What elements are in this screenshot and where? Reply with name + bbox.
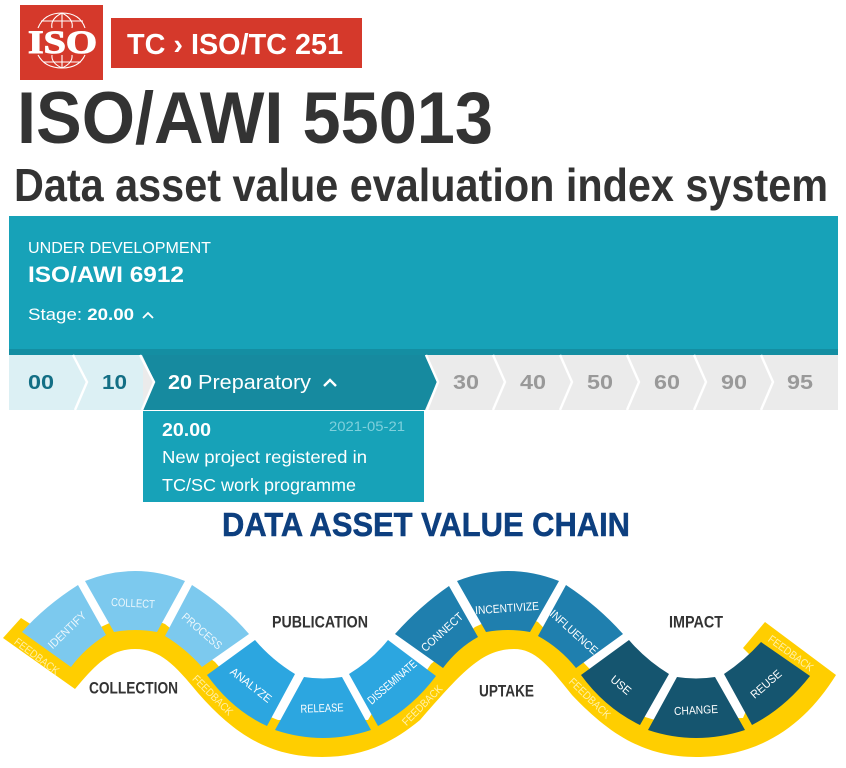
tile labels bbox=[46, 597, 785, 718]
tiles: publication bbox=[207, 640, 436, 738]
feedback labels: FEEDBACK bbox=[765, 633, 816, 675]
feedback labels: FEEDBACK bbox=[566, 676, 613, 722]
stage bar: 50 bbox=[587, 372, 613, 394]
feedback labels: FEEDBACK bbox=[12, 636, 62, 678]
panel: project status: Stage: 20.00 bbox=[28, 306, 134, 324]
tile labels: COLLECT bbox=[111, 597, 155, 611]
phase labels: COLLECTION bbox=[89, 680, 178, 698]
panel: stage detail: 20.00 bbox=[162, 420, 211, 440]
tile labels: DISSEMINATE bbox=[366, 658, 420, 707]
panel: stage detail: New project registered in bbox=[162, 447, 367, 467]
tiles: impact bbox=[581, 640, 810, 738]
stage bar bbox=[9, 355, 838, 410]
value chain diagram bbox=[3, 571, 836, 757]
panel: project status: UNDER DEVELOPMENT bbox=[28, 240, 211, 257]
tile labels: USE bbox=[608, 674, 633, 698]
stage bar: 20 Preparatory bbox=[168, 371, 312, 394]
tile labels: RELEASE bbox=[300, 702, 344, 716]
icon: ISO logo: ISO bbox=[28, 25, 97, 61]
tile labels: ANALYZE bbox=[227, 666, 274, 706]
panel: stage detail: TC/SC work programme bbox=[162, 475, 356, 495]
stage bar: 00 bbox=[28, 372, 54, 394]
panel: project status bbox=[9, 216, 838, 355]
breadcrumb badge: TC › ISO/TC 251 bbox=[127, 29, 343, 61]
feedback labels bbox=[12, 633, 816, 728]
tile labels: CONNECT bbox=[419, 611, 466, 655]
tile labels: CHANGE bbox=[674, 704, 719, 718]
title: ISO/AWI 55013 bbox=[17, 78, 493, 159]
icon: ISO logo bbox=[20, 5, 103, 80]
phase labels: PUBLICATION bbox=[272, 614, 368, 632]
panel: stage detail bbox=[143, 411, 424, 502]
breadcrumb badge bbox=[111, 18, 362, 68]
phase labels: IMPACT bbox=[669, 614, 723, 632]
phase labels bbox=[89, 614, 723, 700]
stage bar: 30 bbox=[453, 372, 479, 394]
tile labels: INCENTIVIZE bbox=[475, 601, 540, 617]
active stage 20 bbox=[142, 355, 437, 410]
chart heading: DATA ASSET VALUE CHAIN bbox=[222, 506, 630, 543]
tile labels: PROCESS bbox=[179, 611, 224, 653]
tiles: uptake bbox=[395, 571, 623, 668]
panel: project status: ISO/AWI 6912 bbox=[28, 262, 184, 287]
feedback labels: FEEDBACK bbox=[400, 683, 446, 728]
tile labels: IDENTIFY bbox=[46, 610, 89, 652]
stage bar: 95 bbox=[787, 372, 813, 394]
tile labels: REUSE bbox=[749, 668, 785, 701]
panel: stage detail: 2021-05-21 bbox=[329, 419, 405, 434]
stage bar: 90 bbox=[721, 372, 747, 394]
tile labels: INFLUENCE bbox=[547, 608, 600, 657]
stage bar: 40 bbox=[520, 372, 546, 394]
stage bar: 60 bbox=[654, 372, 680, 394]
phase labels: UPTAKE bbox=[479, 682, 534, 700]
tiles: collection bbox=[22, 571, 249, 667]
feedback labels: FEEDBACK bbox=[190, 673, 235, 719]
stage bar: 10 bbox=[102, 372, 127, 394]
feedback band bbox=[3, 616, 836, 757]
